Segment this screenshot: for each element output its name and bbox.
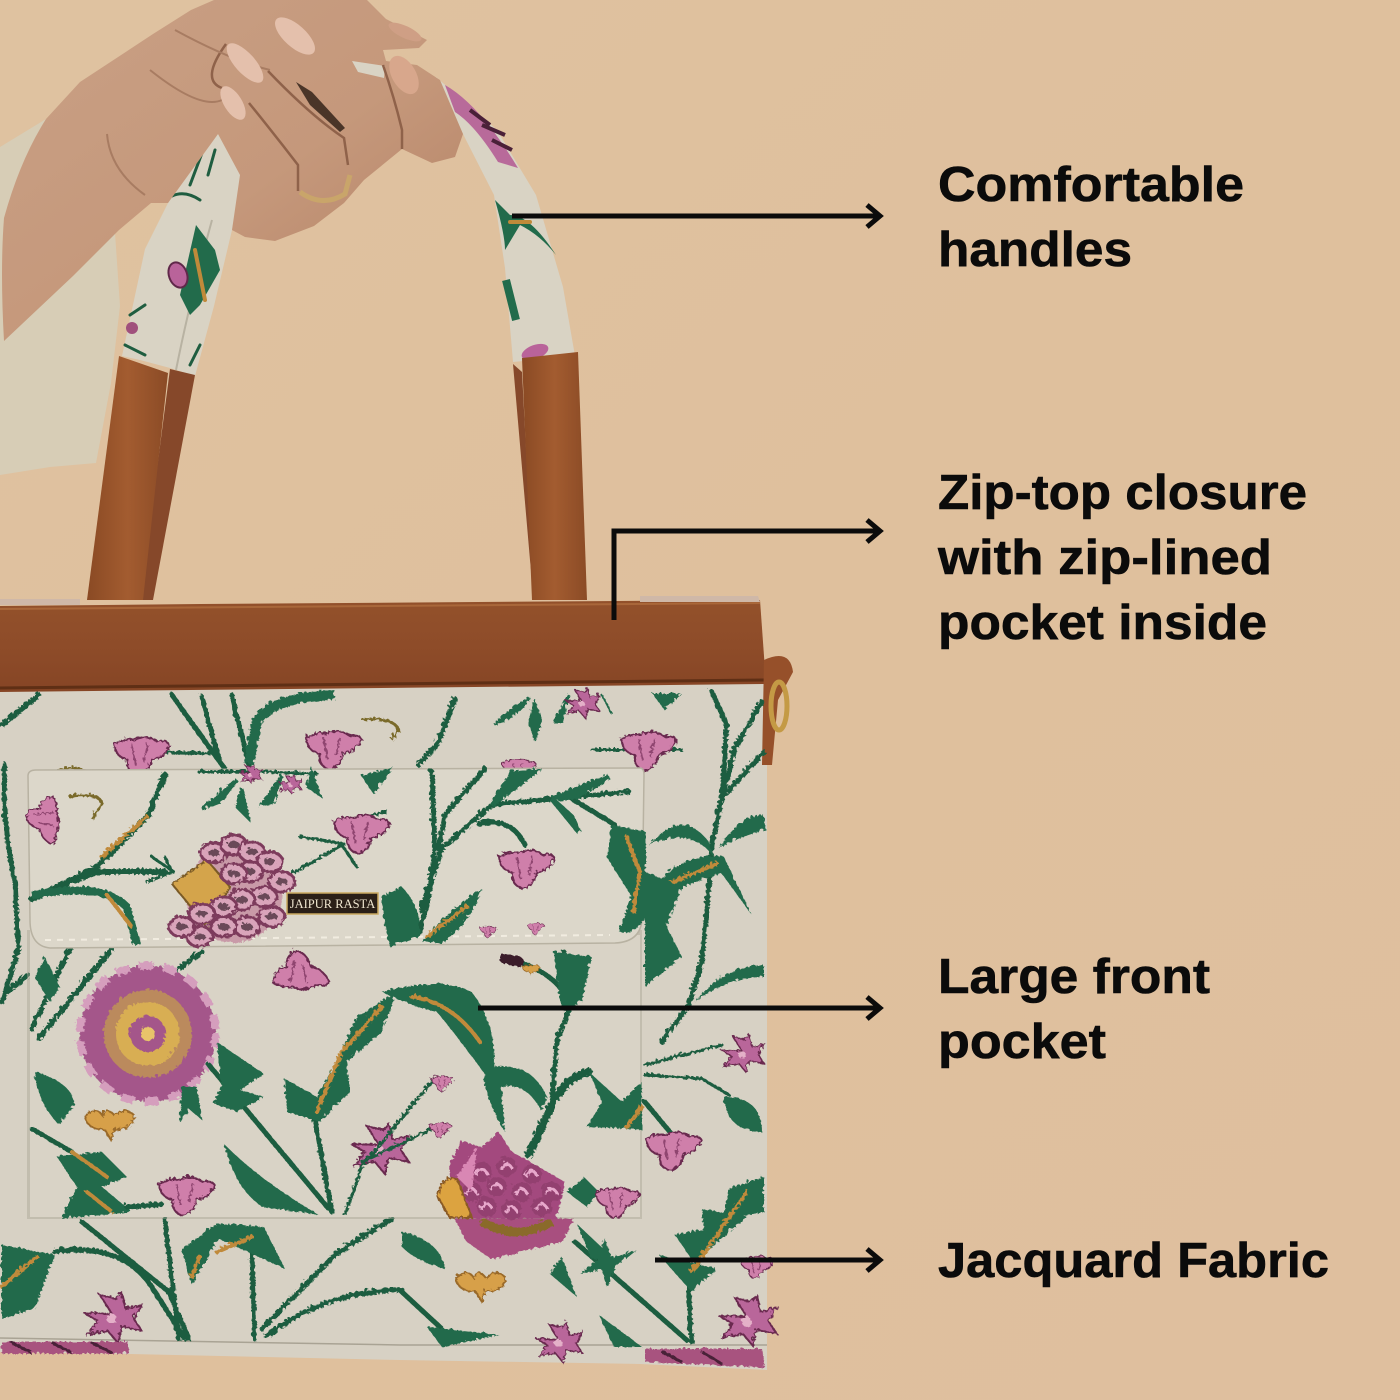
panel: pocket flap: [25, 763, 644, 973]
top leather band: [0, 600, 766, 692]
leather handle tabs: [87, 352, 587, 600]
brand label: [287, 893, 378, 914]
annotation: zip-top closure: [614, 466, 1307, 650]
hand holding handle: [2, 0, 463, 341]
annotation: jacquard fabric: [655, 1234, 1329, 1288]
annotation: comfortable handles: [512, 158, 1244, 277]
panel: front pocket: [27, 930, 642, 1219]
side ring and strap: [762, 656, 793, 765]
bag fabric print: [0, 687, 775, 1366]
arrow: handles: [512, 205, 880, 227]
label: large front pocket: pocket: [938, 1015, 1106, 1069]
bag body: [0, 596, 767, 1370]
icon: right handle: [436, 77, 575, 363]
label: zip-top closure: pocket inside: [938, 596, 1267, 650]
icon: left handle: [122, 134, 245, 376]
label: jacquard fabric: Jacquard Fabric: [938, 1234, 1329, 1288]
arrow: fabric: [655, 1249, 880, 1271]
annotation: large front pocket: [478, 950, 1210, 1069]
arrow: closure: [614, 520, 880, 620]
sleeve: [0, 119, 120, 475]
label: zip-top closure: with zip-lined: [937, 531, 1272, 585]
label: zip-top closure: Zip-top closure: [938, 466, 1307, 520]
label: comfortable handles: handles: [938, 223, 1132, 277]
label: large front pocket: Large front: [938, 950, 1210, 1004]
arrow: front pocket: [478, 997, 880, 1019]
label: comfortable handles: Comfortable: [938, 158, 1244, 212]
brand label: JAIPUR RASTA: [290, 897, 375, 911]
